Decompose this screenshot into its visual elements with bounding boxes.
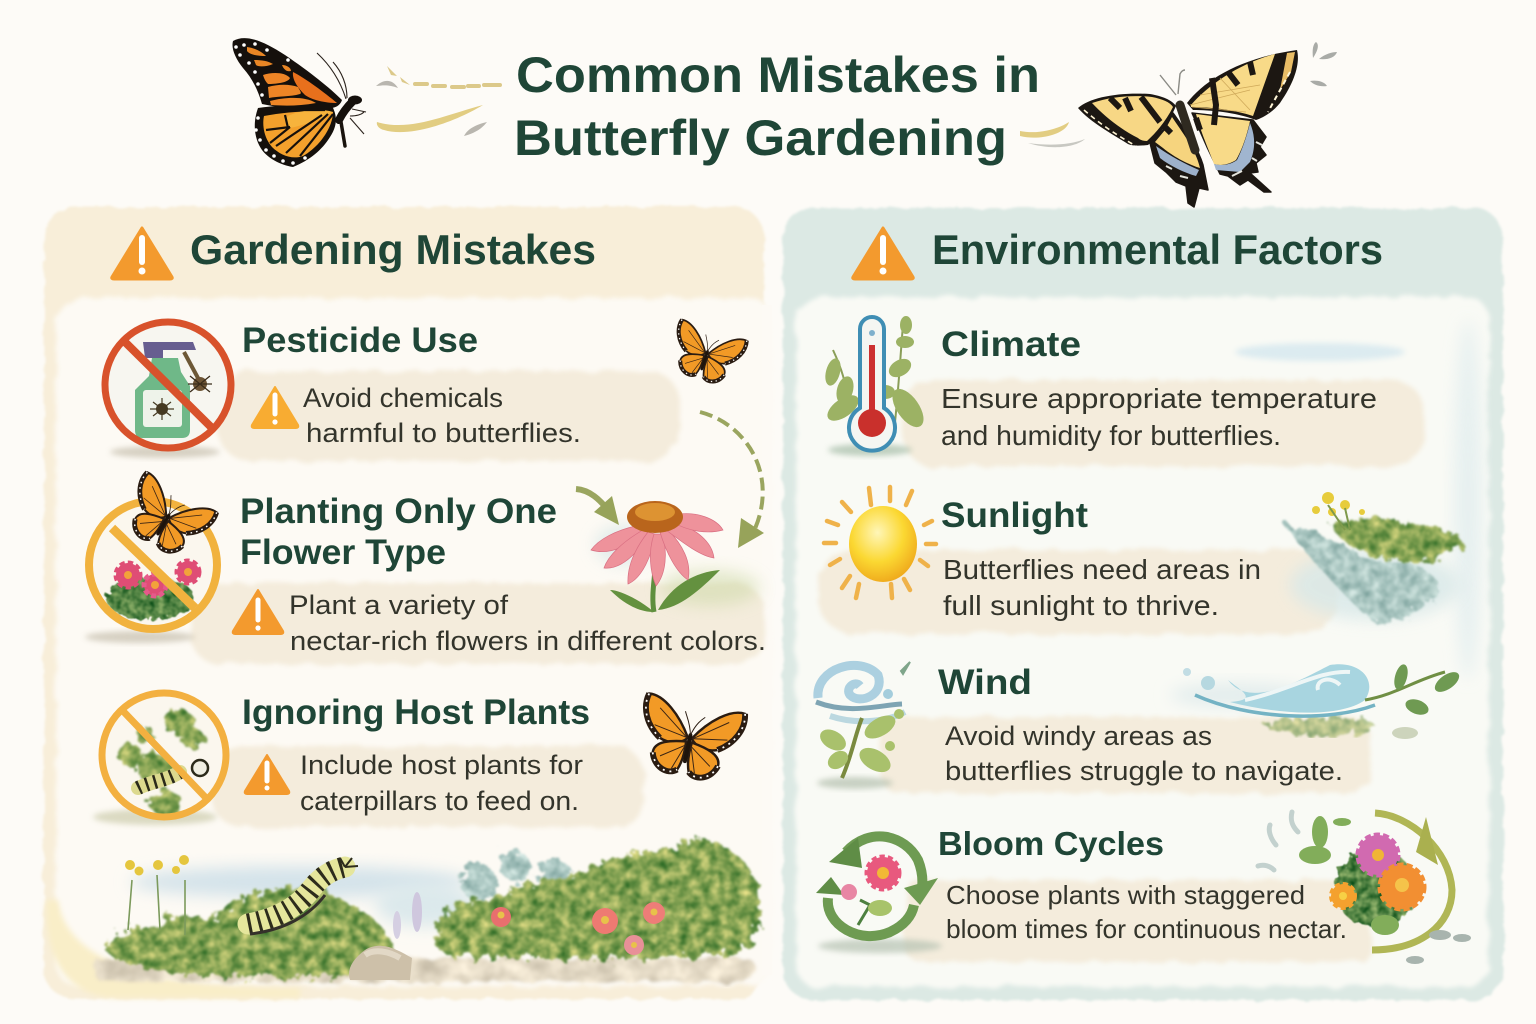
item: pesticide use [105, 321, 581, 458]
item: planting only one flower type: nectar-rich flowers in different colors. [290, 626, 766, 656]
item: wind: Avoid windy areas as [945, 721, 1212, 751]
item: wind [816, 662, 1343, 789]
icon: warning triangle [233, 590, 283, 634]
item: planting only one flower type: Planting Only One [240, 492, 557, 531]
icon: no host plants [93, 693, 226, 825]
illustration: garden scene with caterpillar [95, 840, 759, 982]
icon: monarch near host plants [633, 693, 746, 785]
item: ignoring host plants: caterpillars to feed on. [300, 786, 579, 816]
illustration: bouquet with cycle arrow [1258, 812, 1471, 964]
item: climate: Ensure appropriate temperature [941, 383, 1377, 414]
item: sunlight [824, 487, 1261, 621]
title [514, 47, 1040, 166]
arrow: curved arrow to coneflower [576, 489, 619, 525]
title: Butterfly Gardening [514, 110, 1007, 166]
icon: monarch on prohibition sign [117, 472, 217, 564]
item: bloom cycles [816, 825, 1164, 953]
heading: environmental factors: Environmental Factors [932, 226, 1383, 273]
item: climate [823, 316, 1377, 456]
item: wind: butterflies struggle to navigate. [945, 756, 1343, 786]
item: climate: and humidity for butterflies. [941, 420, 1281, 451]
item: sunlight: full sunlight to thrive. [943, 590, 1219, 621]
text: bloom cycles description: Choose plants with staggered [946, 880, 1305, 910]
icon: monarch butterfly top left [232, 38, 366, 167]
item: sunlight: Butterflies need areas in [943, 554, 1261, 585]
text: bloom cycles description [946, 880, 1347, 944]
item: wind: Wind [938, 663, 1032, 702]
item: sunlight: Sunlight [941, 496, 1088, 535]
item: pesticide use: harmful to butterflies. [306, 418, 581, 448]
icon: warning triangle [245, 755, 289, 794]
illustration: wave and leaves [1170, 663, 1462, 739]
panel: environmental factors [783, 208, 1503, 1000]
icon: sun [824, 487, 936, 598]
icon: bloom cycle arrows [816, 836, 942, 953]
item: planting only one flower type: Plant a variety of [289, 590, 509, 620]
item: planting only one flower type [85, 472, 766, 656]
caterpillar [248, 858, 358, 934]
panel: gardening mistakes [44, 207, 772, 999]
illustration: sunlit bush [1285, 492, 1461, 623]
item: ignoring host plants: Include host plants for [300, 750, 583, 780]
icon: warning triangle [112, 228, 172, 279]
icon: no pesticide spray [105, 322, 231, 458]
decoration: motion lines right of title [1020, 42, 1337, 147]
item: climate: Climate [941, 325, 1081, 364]
illustration: pink coneflower [576, 489, 760, 612]
item: ignoring host plants: Ignoring Host Plants [242, 693, 590, 732]
item: pesticide use: Avoid chemicals [303, 383, 503, 413]
item: ignoring host plants [93, 693, 590, 825]
icon: swallowtail butterfly [1078, 50, 1298, 207]
item: planting only one flower type: Flower Type [240, 533, 446, 572]
item: pesticide use: Pesticide Use [242, 321, 478, 360]
icon: small monarch near pesticide [666, 319, 747, 388]
icon: no single flower [85, 500, 218, 643]
wash: text strip backgrounds [190, 371, 1424, 962]
decoration: pale blue wash near climate [1235, 343, 1405, 361]
icon: thermometer with leaves [823, 316, 930, 456]
item: bloom cycles: Bloom Cycles [938, 825, 1164, 862]
icon: warning triangle [853, 228, 913, 279]
icon: warning triangle [252, 387, 298, 428]
icon: wind swirl with sprout [816, 662, 910, 789]
text: bloom cycles description: bloom times for continuous nectar. [946, 914, 1347, 944]
arrow: dashed curve to flower [700, 412, 764, 548]
decoration: motion lines left of title [376, 66, 500, 136]
title: Common Mistakes in [516, 47, 1040, 103]
heading: gardening mistakes: Gardening Mistakes [190, 226, 596, 273]
